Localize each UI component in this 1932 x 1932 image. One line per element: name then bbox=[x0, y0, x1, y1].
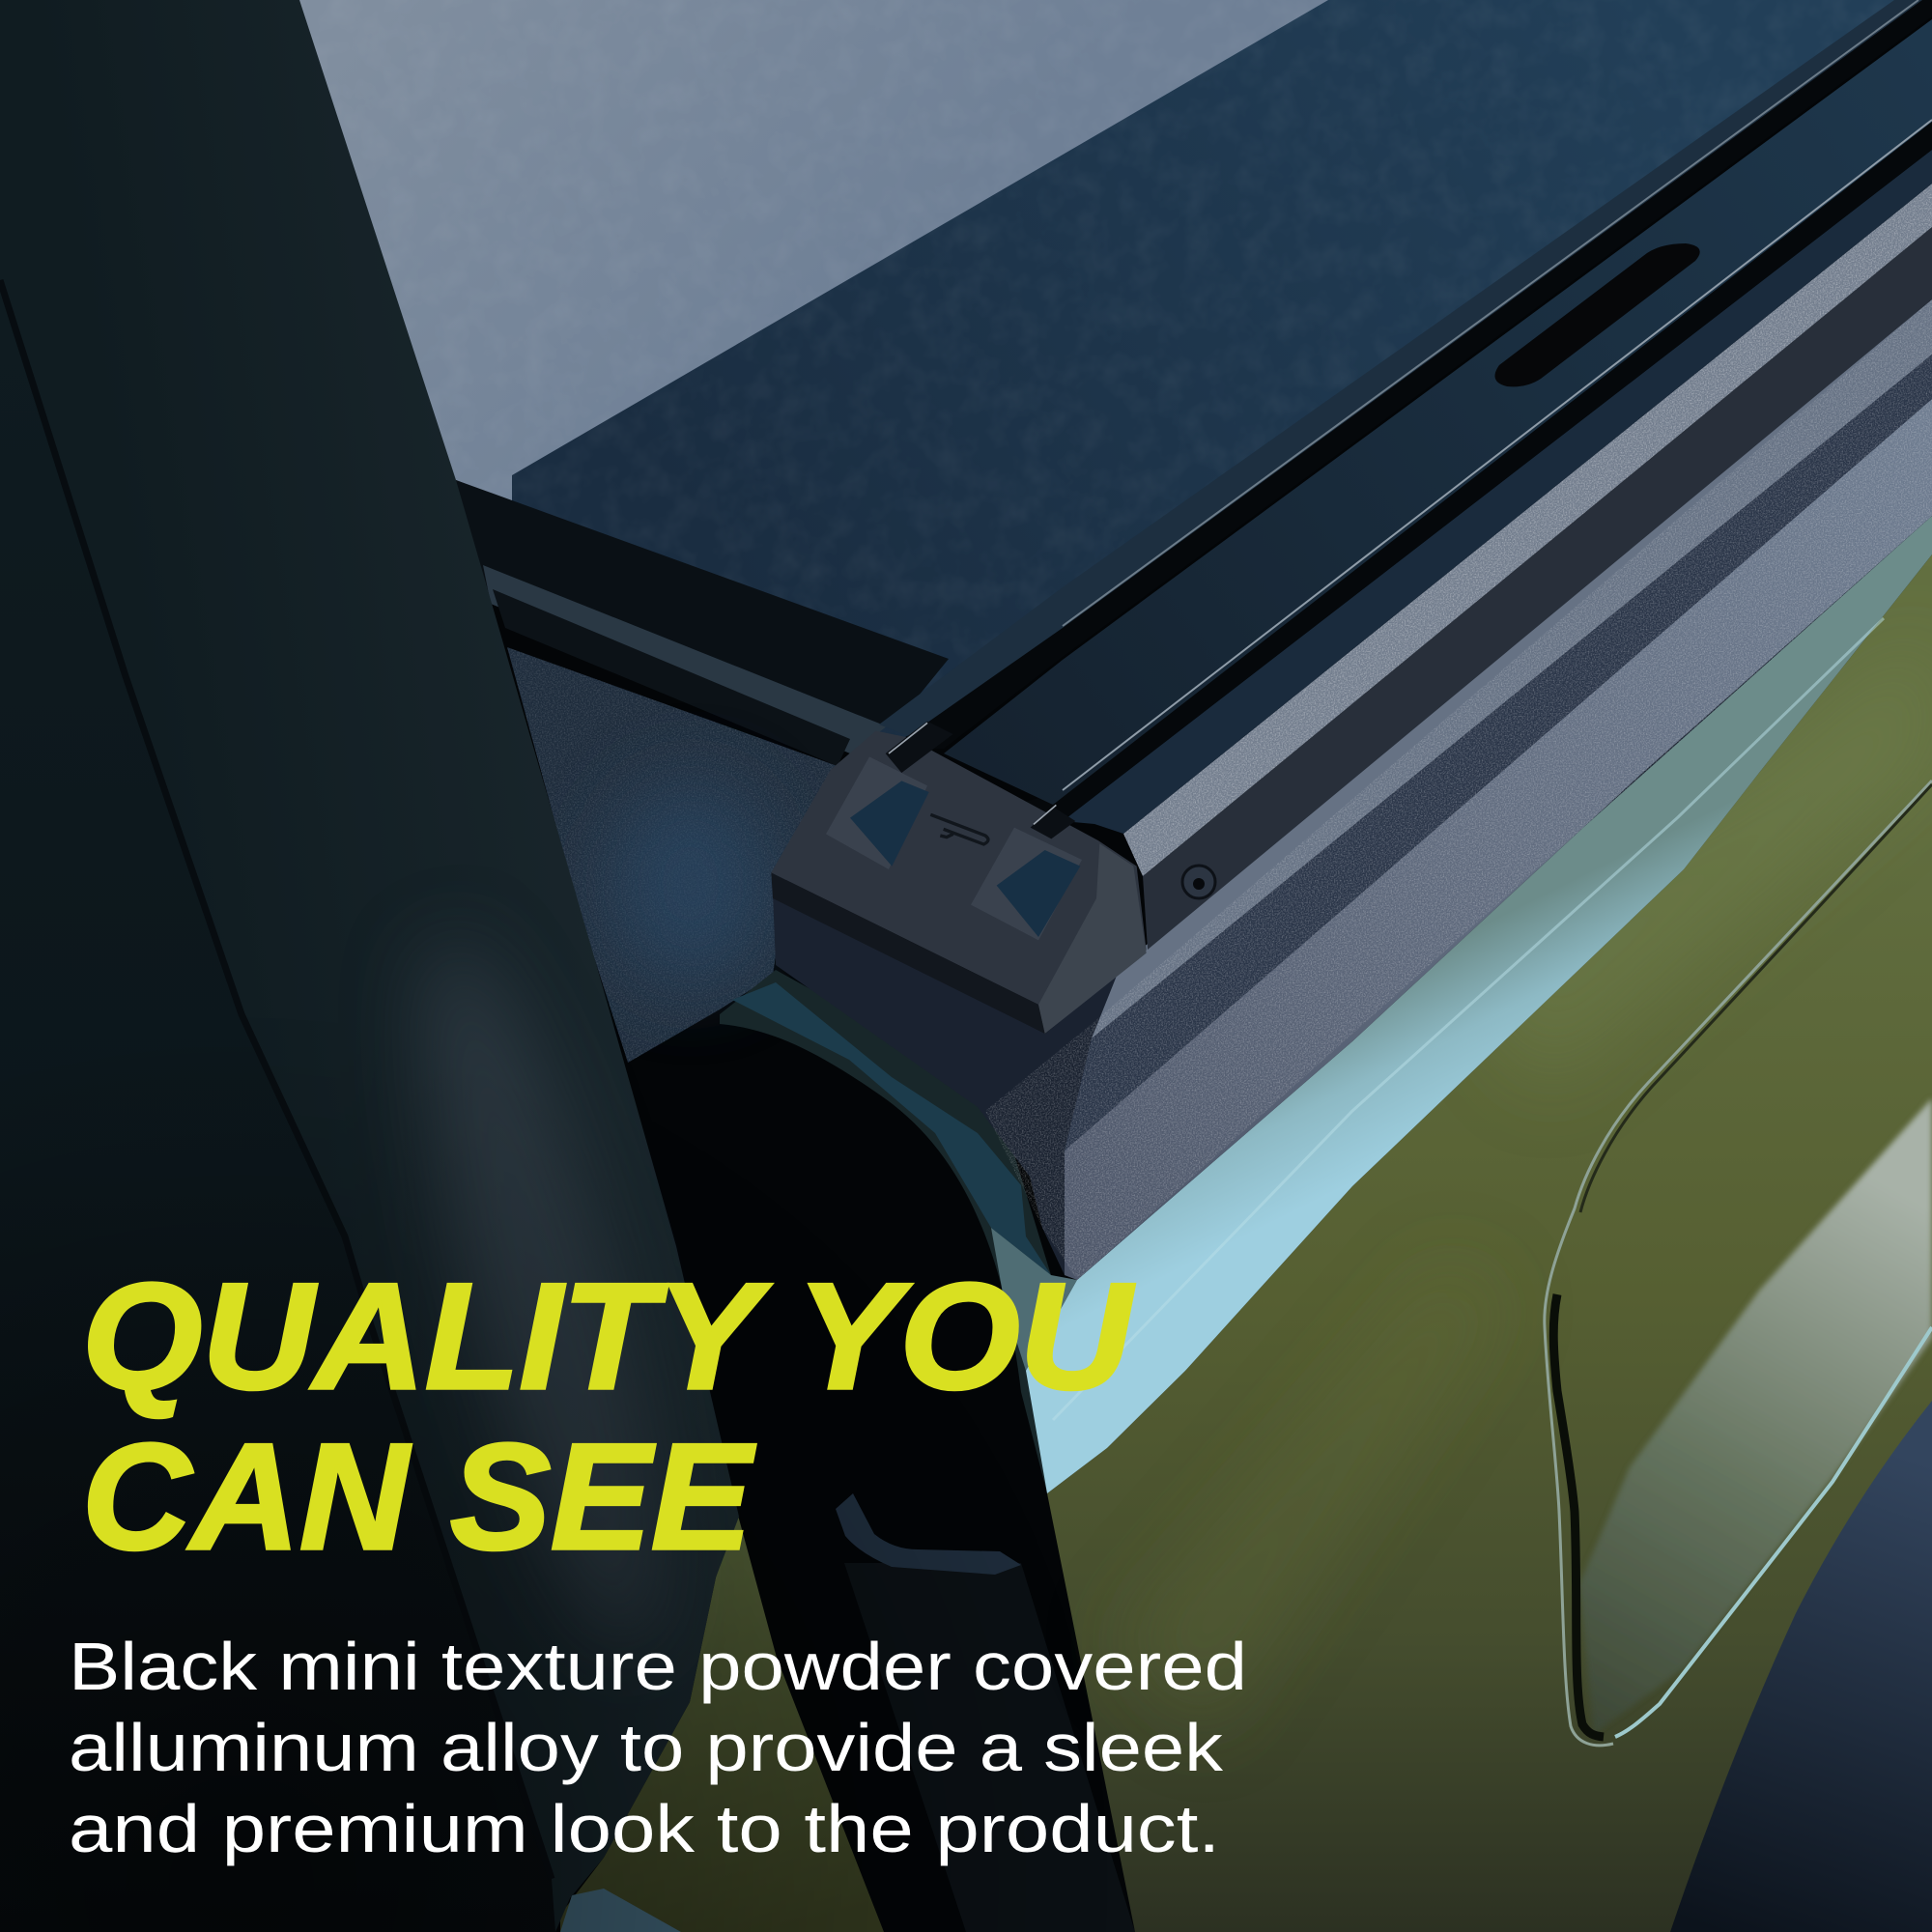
rail slot bbox=[1495, 243, 1700, 386]
cap logo bbox=[930, 814, 988, 844]
end cap bbox=[771, 722, 1147, 1034]
jamb teal highlight bbox=[732, 982, 1051, 1275]
rubber seal bbox=[456, 480, 949, 766]
bed carpet in shadow bbox=[512, 0, 1917, 744]
green lower panel sliver bbox=[560, 1512, 884, 1932]
title: QUALITY YOU CAN SEE bbox=[82, 1253, 1134, 1581]
side screw bbox=[1182, 866, 1215, 898]
cap notch left bbox=[826, 756, 927, 869]
cap seam grooves bbox=[886, 722, 953, 773]
description text: and premium look to the product. bbox=[69, 1791, 1220, 1866]
flange light face bbox=[1065, 399, 1932, 1280]
pale blue reflected edge bbox=[1026, 516, 1932, 1493]
outer lip bbox=[879, 0, 1922, 736]
rail textured slope bbox=[1123, 184, 1932, 876]
wheel arch bbox=[1670, 1401, 1932, 1932]
flange base bbox=[773, 299, 1932, 1280]
door jamb rim bbox=[720, 970, 1051, 1493]
rail lower strip bbox=[1063, 150, 1932, 834]
groove 1 bbox=[889, 0, 1932, 749]
groove 2 bbox=[1024, 122, 1932, 821]
cap notch right bbox=[971, 828, 1082, 940]
green body panel bbox=[1047, 554, 1932, 1932]
description text: Black mini texture powder covered bbox=[69, 1629, 1247, 1704]
cap front edge bbox=[771, 872, 1045, 1034]
rail centre panel bbox=[944, 19, 1932, 805]
cap right bevel bbox=[1038, 843, 1147, 1034]
pillar left face bbox=[0, 280, 555, 1932]
carpet texture bbox=[290, 0, 1917, 744]
pillar main face bbox=[0, 0, 739, 1932]
description text: alluminum alloy to provide a sleek bbox=[69, 1710, 1224, 1785]
fuel door outline bbox=[1545, 781, 1932, 1746]
bed rail inner surface bbox=[507, 647, 838, 1063]
flange upper stripe bbox=[1092, 299, 1932, 1038]
title: QUALITY YOU CAN SEE: CAN SEE bbox=[82, 1413, 755, 1581]
rail highlight lines bbox=[1063, 0, 1932, 790]
cap top face bbox=[771, 731, 1147, 1034]
green reflection streaks bbox=[1111, 628, 1932, 1739]
speckled rail flange bbox=[773, 299, 1932, 1280]
blue sliver at bottom bbox=[560, 1889, 681, 1932]
flange dark band bbox=[1065, 355, 1932, 1151]
pillar / cab body bbox=[0, 0, 739, 1932]
title: QUALITY YOU CAN SEE: QUALITY YOU bbox=[82, 1253, 1134, 1421]
flange sparkle bbox=[985, 299, 1932, 1280]
description text bbox=[69, 1629, 1247, 1866]
fuel door reflection bbox=[1579, 1098, 1932, 1734]
rail side wall bbox=[1143, 227, 1932, 950]
jamb rubber stop bbox=[836, 1493, 1021, 1575]
pillar sheen bbox=[376, 922, 706, 1667]
jamb rubber stop body bbox=[844, 1563, 1135, 1932]
bed carpet in sunlight bbox=[290, 0, 1338, 502]
jamb grey edge bbox=[991, 1228, 1077, 1371]
